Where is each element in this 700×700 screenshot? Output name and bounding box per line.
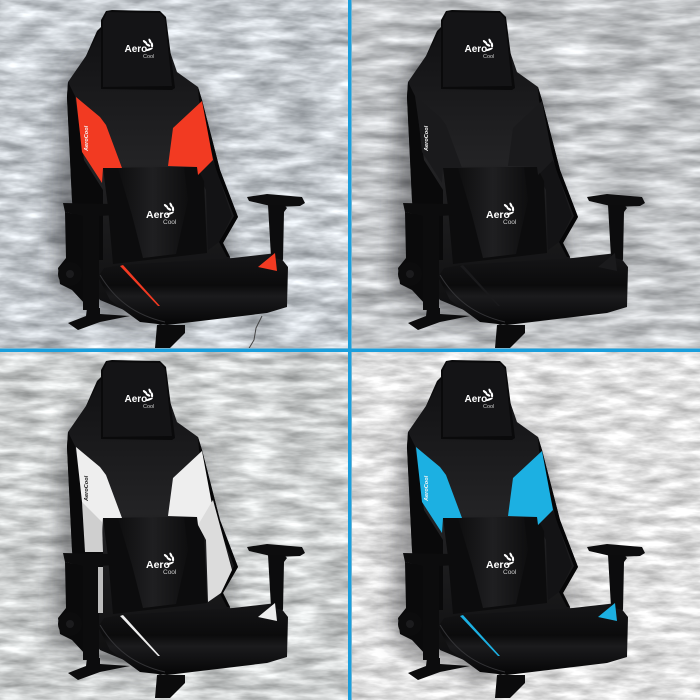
- headrest logo: [464, 388, 494, 408]
- lumbar logo: Cool: [163, 219, 177, 226]
- lumbar logo: Cool: [503, 219, 517, 226]
- black accent panels: [420, 101, 616, 290]
- lumbar logo: [486, 202, 516, 224]
- panel: red chair: [0, 0, 350, 350]
- headrest logo: Aero: [124, 394, 147, 405]
- chair: red: [58, 10, 305, 348]
- panel: white chair: [0, 350, 350, 700]
- side logo: AeroCool: [84, 475, 90, 502]
- headrest logo: [464, 38, 494, 58]
- blue accent panels: [416, 447, 617, 656]
- lumbar logo: Cool: [163, 569, 177, 576]
- headrest logo: Aero: [124, 44, 147, 55]
- headrest logo: Cool: [143, 404, 154, 410]
- headrest logo: Aero: [464, 394, 487, 405]
- lumbar logo: Aero: [486, 209, 510, 221]
- lumbar logo: Cool: [503, 569, 517, 576]
- panel: black chair: [350, 0, 700, 350]
- headrest logo: Cool: [483, 54, 494, 60]
- lumbar logo: [146, 552, 176, 574]
- white accent panels: [76, 447, 277, 656]
- chair: black: [398, 10, 645, 348]
- headrest logo: [124, 388, 154, 408]
- side logo: AeroCool: [424, 475, 430, 502]
- lumbar logo: Aero: [146, 559, 170, 571]
- red accent panels: [76, 97, 277, 306]
- lumbar logo: [486, 552, 516, 574]
- headrest logo: Cool: [143, 54, 154, 60]
- chair: white: [58, 360, 305, 698]
- chair: blue: [398, 360, 645, 698]
- side logo: AeroCool: [84, 125, 90, 152]
- lumbar logo: Aero: [486, 559, 510, 571]
- side logo: AeroCool: [424, 125, 430, 152]
- lumbar logo: [146, 202, 176, 224]
- headrest logo: Cool: [483, 404, 494, 410]
- headrest logo: [124, 38, 154, 58]
- panel: blue chair: [350, 350, 700, 700]
- lumbar logo: Aero: [146, 209, 170, 221]
- headrest logo: Aero: [464, 44, 487, 55]
